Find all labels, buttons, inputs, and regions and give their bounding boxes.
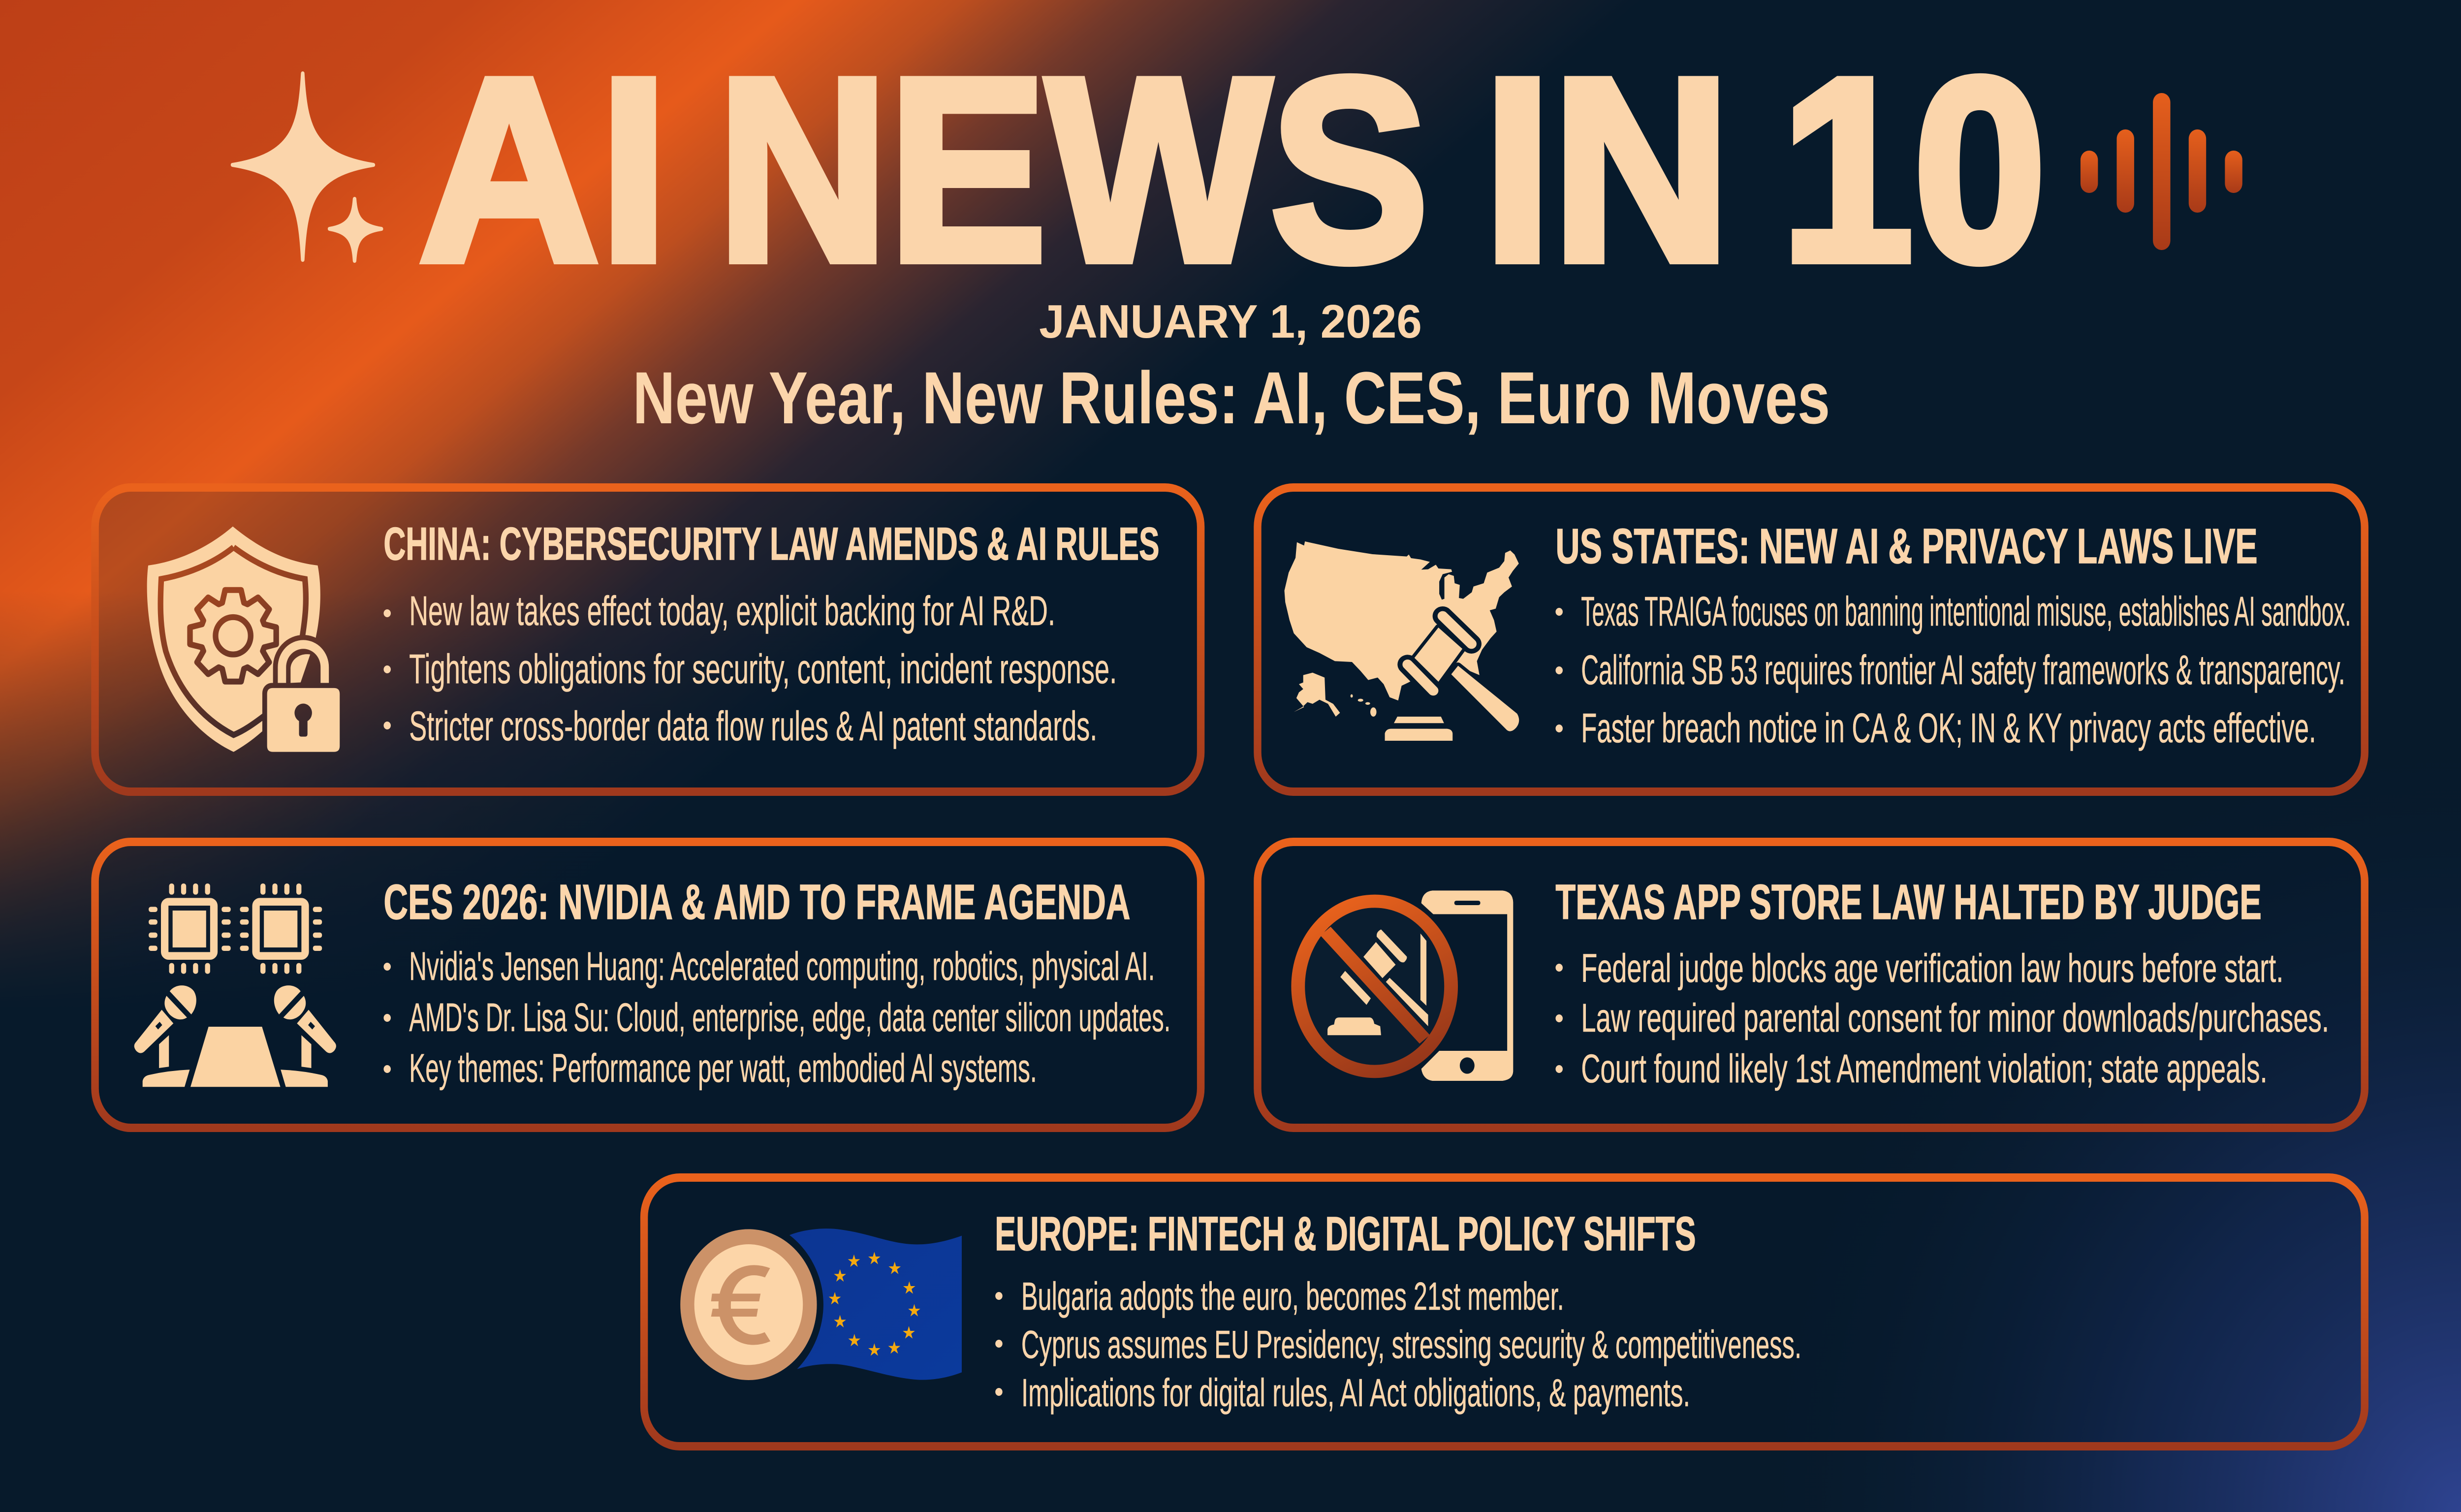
panel: CES 2026: [95, 842, 1201, 1128]
bullet list: [1555, 945, 2329, 1091]
icon: euro coin and EU flag: [680, 1228, 962, 1380]
icon: audio bars: [2081, 93, 2242, 250]
bullet list: Implications for digital rules, AI Act obligations, & payments.: [1021, 1371, 1690, 1415]
title: 10: [1781, 25, 2046, 315]
panel frame: [1258, 842, 2365, 1128]
date: JANUARY 1, 2026: [1039, 295, 1422, 348]
panel frame: [1258, 487, 2365, 791]
icon: phone with banned gavel: [1298, 890, 1513, 1081]
bullet list: [383, 944, 1170, 1091]
icon: chips and microphones: [134, 883, 336, 1087]
panel frame: [644, 1177, 2365, 1446]
title: NEWS: [717, 25, 1428, 315]
bullet list: Cyprus assumes EU Presidency, stressing security & competitiveness.: [1021, 1323, 1801, 1367]
icon: sparkles: [232, 73, 381, 261]
heading: CES 2026: NVIDIA & AMD TO FRAME AGENDA: [383, 875, 1131, 930]
panel frame: [95, 487, 1201, 791]
panel: Texas app store: [1258, 842, 2365, 1128]
title: AI: [419, 25, 668, 315]
panel: China: [95, 487, 1201, 791]
icon: US map with gavel: [1284, 541, 1519, 741]
icon: shield with gear and padlock: [147, 527, 340, 752]
bullet list: New law takes effect today, explicit backing for AI R&D.: [409, 588, 1055, 634]
title: IN: [1483, 25, 1731, 315]
bullet list: [383, 588, 1117, 750]
bullet list: Nvidia's Jensen Huang: Accelerated computing, robotics, physical AI.: [409, 944, 1155, 989]
bullet list: [995, 1275, 1801, 1415]
panel: US states: [1258, 487, 2365, 791]
bullet list: Key themes: Performance per watt, embodied AI systems.: [409, 1045, 1037, 1091]
heading: CHINA: CYBERSECURITY LAW AMENDS & AI RULES: [383, 518, 1160, 570]
title: [419, 25, 2046, 315]
bullet list: [1555, 589, 2351, 752]
bullet list: AMD's Dr. Lisa Su: Cloud, enterprise, edge, data center silicon updates.: [409, 995, 1170, 1040]
bullet list: Bulgaria adopts the euro, becomes 21st member.: [1021, 1275, 1564, 1319]
bullet list: Tightens obligations for security, content, incident response.: [409, 646, 1117, 693]
heading: EUROPE: FINTECH & DIGITAL POLICY SHIFTS: [995, 1207, 1696, 1260]
subtitle: New Year, New Rules: AI, CES, Euro Moves: [632, 357, 1830, 439]
bullet list: Stricter cross-border data flow rules & AI patent standards.: [409, 703, 1097, 750]
panel frame: [95, 842, 1201, 1128]
panel: Europe: [644, 1177, 2365, 1446]
